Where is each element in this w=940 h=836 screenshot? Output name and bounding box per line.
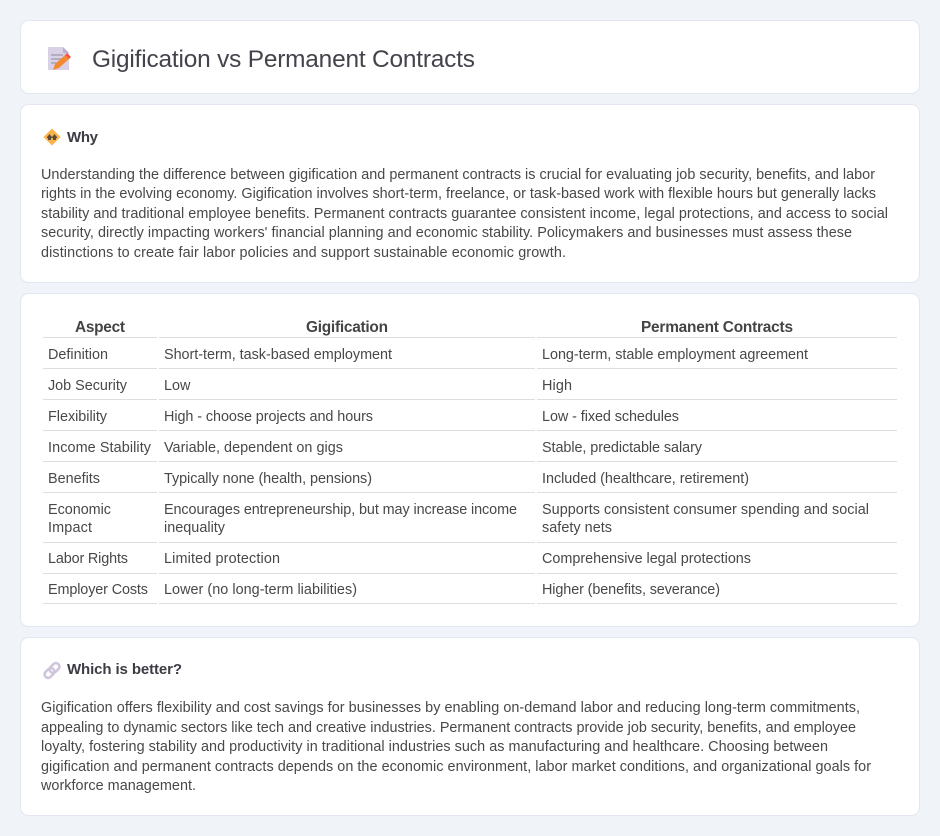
row: economic impact: Encourages entrepreneurship, but may increase income <box>164 502 517 518</box>
row: flexibility: Flexibility <box>48 409 108 425</box>
row: economic impact: safety nets <box>542 520 612 536</box>
panel: header <box>20 20 920 94</box>
row: economic impact: Economic <box>48 502 111 518</box>
row: economic impact <box>48 502 869 536</box>
text block: why paragraph: rights in the evolving economy. Gigification involves short-term, freelance, or task-based work with flexible hours but generally lacks <box>41 186 876 202</box>
row: benefits: Typically none (health, pensions) <box>164 471 372 487</box>
table header <box>75 319 793 336</box>
row: labor rights: Comprehensive legal protections <box>542 551 751 567</box>
icon: warning diamond <box>44 128 60 146</box>
row: definition: Short-term, task-based employment <box>164 347 392 363</box>
icon: memo with pencil <box>48 47 71 70</box>
row: economic impact: Impact <box>48 520 92 536</box>
row: economic impact: Supports consistent consumer spending and social <box>542 502 869 518</box>
row: labor rights <box>48 551 751 567</box>
row: economic impact: inequality <box>164 520 226 536</box>
row: labor rights: Limited protection <box>164 551 280 567</box>
row: employer costs: Lower (no long-term liabilities) <box>164 582 357 598</box>
text block: why paragraph: distinctions to create fair labor policies and support sustainable economic growth. <box>41 245 566 261</box>
row: benefits: Benefits <box>48 471 100 487</box>
row: job security <box>48 378 572 394</box>
panel: why <box>20 104 920 282</box>
row: employer costs <box>48 582 720 598</box>
heading: why: Why <box>67 129 99 146</box>
text block: why paragraph <box>41 167 888 261</box>
table header: Aspect <box>75 319 125 336</box>
text block: which is better paragraph: gigification and permanent contracts depends on the economic environment, labor market conditions, and organizational goals for <box>41 759 871 775</box>
row: definition <box>48 347 808 363</box>
text block: which is better paragraph: appealing to dynamic sectors like tech and creative industries. Permanent contracts provide job security, benefits, and employee <box>41 720 856 736</box>
panel: which is better <box>20 638 920 816</box>
text block: why paragraph: Understanding the difference between gigification and permanent contracts is crucial for evaluating job security, benefits, and labor <box>41 167 875 183</box>
text block: why paragraph: security, directly impacting workers' financial planning and economic stability. Policymakers and businesses must assess these <box>41 225 852 241</box>
table header: Permanent Contracts <box>641 319 793 336</box>
icon: link <box>43 662 61 679</box>
row: labor rights: Labor Rights <box>48 551 128 567</box>
row: benefits: Included (healthcare, retirement) <box>542 471 749 487</box>
row: job security: Low <box>164 378 191 394</box>
text block: which is better paragraph <box>40 700 871 794</box>
row: flexibility: High - choose projects and hours <box>164 409 373 425</box>
row: employer costs: Employer Costs <box>48 582 148 598</box>
row: flexibility <box>48 409 679 425</box>
table header: Gigification <box>306 319 388 336</box>
heading: which is better: Which is better? <box>67 661 182 678</box>
row: income stability: Income Stability <box>48 440 152 456</box>
title: Gigification vs Permanent Contracts <box>92 46 475 73</box>
row: flexibility: Low - fixed schedules <box>542 409 679 425</box>
text block: why paragraph: stability and traditional employee benefits. Permanent contracts guarantee consistent income, legal protections, and access to social <box>41 206 888 222</box>
row: benefits <box>48 471 749 487</box>
row: income stability: Variable, dependent on gigs <box>164 440 343 456</box>
row: employer costs: Higher (benefits, severance) <box>542 582 720 598</box>
text block: which is better paragraph: loyalty, fostering stability and productivity in traditional industries such as manufacturing and healthcare. Choosing between <box>41 739 828 755</box>
row: job security: Job Security <box>48 378 128 394</box>
row: definition: Long-term, stable employment agreement <box>542 347 808 363</box>
panel: comparison table <box>20 294 920 626</box>
row: job security: High <box>542 378 572 394</box>
text block: which is better paragraph: workforce management. <box>40 778 196 794</box>
row: income stability <box>48 440 703 456</box>
row: income stability: Stable, predictable salary <box>542 440 703 456</box>
text block: which is better paragraph: Gigification offers flexibility and cost savings for businesses by enabling on-demand labor and reducing long-term commitments, <box>41 700 860 716</box>
row: definition: Definition <box>48 347 108 363</box>
